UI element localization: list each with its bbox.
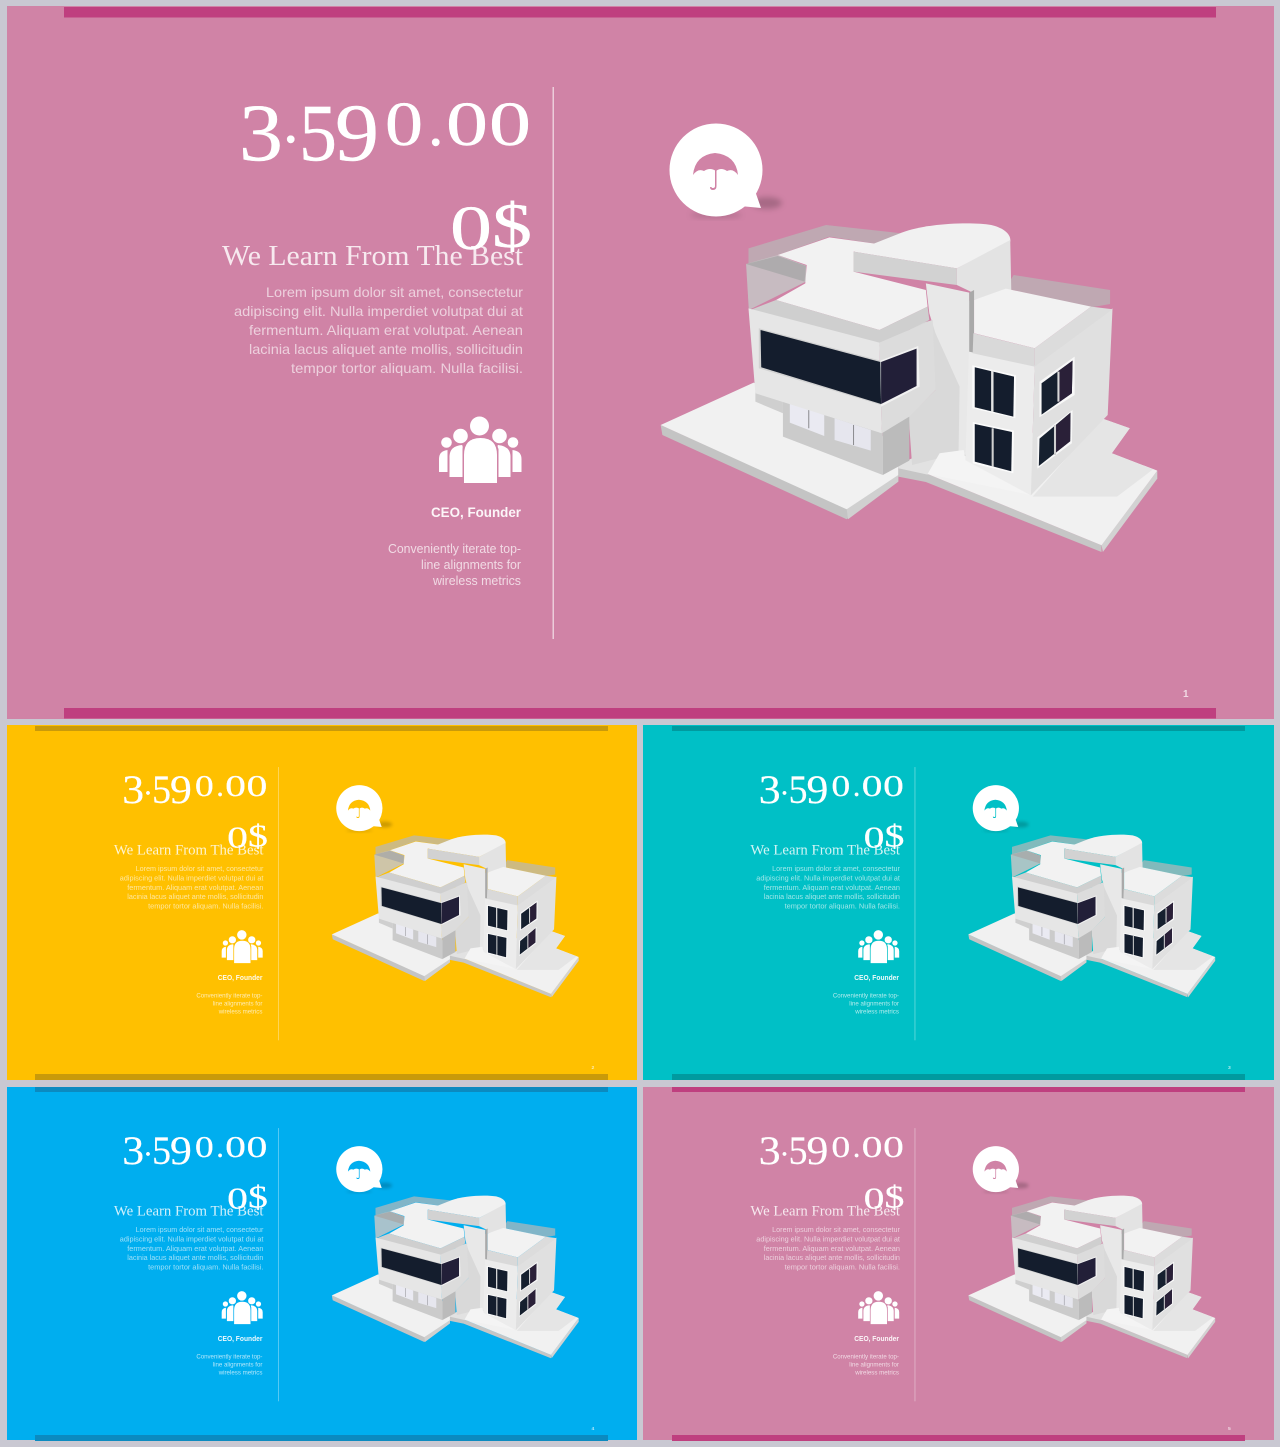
price heading: 0 [862,1130,883,1164]
body text: Lorem ipsum dolor sit amet, consectetur [136,866,264,873]
icon: people group [439,416,522,483]
price heading: 0 [247,769,267,803]
role description: line alignments for [849,1001,899,1008]
price heading: 3 [759,1128,781,1173]
icon: people group [858,1291,899,1324]
illustration: white building [968,835,1215,997]
icon: umbrella speech bubble [670,124,782,218]
price heading: 5 [152,1128,171,1173]
body text: Lorem ipsum dolor sit amet, consectetur [772,866,901,873]
panel: yellow slide [7,725,637,1080]
role description: Conveniently iterate top- [196,993,262,1000]
role label: CEO, Founder [431,504,522,520]
role description: wireless metrics [854,1370,899,1377]
price heading: 5 [152,767,171,812]
price heading: 9 [806,767,828,812]
price heading: 5 [299,87,337,178]
price heading: 5 [789,767,807,812]
price heading: 0 [225,1130,246,1164]
vertical divider line [277,767,280,1040]
body text: fermentum. Aliquam erat volutpat. Aenean [249,322,523,338]
vertical divider line [914,1128,916,1401]
icon: umbrella speech bubble [336,1146,392,1193]
vertical divider line [914,767,916,1040]
role description: Conveniently iterate top- [833,993,899,1000]
price heading: . [216,769,224,803]
body text: tempor tortor aliquam. Nulla facilisi. [785,1265,900,1272]
body text: tempor tortor aliquam. Nulla facilisi. [148,904,264,911]
price heading: 0 [862,769,883,803]
price heading: 0 [247,1130,267,1164]
body text: adipiscing elit. Nulla imperdiet volutpat dui at [756,875,900,882]
slide content [750,767,1231,1071]
price heading: $ [248,1179,268,1214]
icon: people group [222,930,263,963]
price heading: 9 [335,87,379,178]
subtitle: We Learn From The Best [114,843,263,859]
price heading: . [853,769,860,803]
price heading: $ [885,1179,904,1214]
body text: fermentum. Aliquam erat volutpat. Aenean [764,1246,900,1253]
body text: lacinia lacus aliquet ante mollis, sollicitudin [127,1255,264,1262]
price heading: 5 [789,1128,807,1173]
body text: lacinia lacus aliquet ante mollis, sollicitudin [764,1255,900,1262]
role description: line alignments for [213,1362,262,1369]
icon: umbrella speech bubble [973,1146,1029,1193]
icon: umbrella speech bubble [973,785,1029,832]
role label: CEO, Founder [218,1336,263,1343]
panel: small pink slide [643,1087,1274,1441]
body text: fermentum. Aliquam erat volutpat. Aenean [764,885,900,892]
body text: Lorem ipsum dolor sit amet, consectetur [772,1227,901,1234]
subtitle: We Learn From The Best [114,1204,263,1220]
icon: people group [858,930,899,963]
illustration: white building [661,223,1157,552]
body text: fermentum. Aliquam erat volutpat. Aenean [127,1246,264,1253]
price heading: 0 [831,769,850,803]
role description: line alignments for [213,1001,262,1008]
role description: wireless metrics [854,1009,899,1016]
price heading: . [853,1130,860,1164]
price heading: 0 [195,769,214,803]
body text: fermentum. Aliquam erat volutpat. Aenean [127,885,264,892]
illustration: white building [332,835,579,997]
price heading: 0 [489,91,531,159]
body text: tempor tortor aliquam. Nulla facilisi. [148,1265,264,1272]
panel: teal slide [643,725,1274,1080]
role description: line alignments for [849,1362,899,1369]
page number: 2 [591,1065,594,1071]
price heading: 9 [170,767,192,812]
body text: Lorem ipsum dolor sit amet, consectetur [136,1227,264,1234]
price heading: 0 [225,769,246,803]
price heading: 0 [195,1130,214,1164]
role description: Conveniently iterate top- [196,1354,262,1361]
role label: CEO, Founder [218,975,263,982]
role description: Conveniently iterate top- [388,542,521,556]
body text: Lorem ipsum dolor sit amet, consectetur [266,284,523,300]
subtitle: We Learn From The Best [222,240,523,272]
price heading: 3 [239,87,283,178]
page number: 3 [1228,1065,1231,1071]
illustration: white building [968,1196,1215,1358]
body text: tempor tortor aliquam. Nulla facilisi. [291,360,523,376]
price heading: . [781,1128,788,1162]
body text: adipiscing elit. Nulla imperdiet volutpat dui at [234,303,523,319]
icon: umbrella speech bubble [336,785,392,832]
panel: blue slide [7,1087,637,1441]
price heading: . [428,91,444,159]
body text: lacinia lacus aliquet ante mollis, sollicitudin [127,894,264,901]
price heading: 3 [122,767,144,812]
role description: wireless metrics [432,574,521,588]
price heading: $ [492,191,532,261]
body text: adipiscing elit. Nulla imperdiet volutpat dui at [120,1236,263,1243]
price heading: 3 [122,1128,144,1173]
price heading: 0 [227,1181,248,1215]
slide content [114,767,594,1071]
price heading: 0 [864,820,885,854]
price heading: 9 [806,1128,828,1173]
role description: Conveniently iterate top- [833,1354,899,1361]
vertical divider line [552,87,554,639]
price heading: 3 [759,767,781,812]
slide content [750,1128,1231,1432]
page number: 5 [1228,1426,1231,1432]
panel: large pink slide [7,6,1274,719]
page number: 4 [591,1426,594,1432]
subtitle: We Learn From The Best [750,843,900,859]
role description: line alignments for [421,558,521,572]
price heading: 0 [864,1181,885,1215]
illustration: white building [332,1196,579,1358]
body text: lacinia lacus aliquet ante mollis, sollicitudin [249,341,523,357]
price heading: 9 [170,1128,192,1173]
page number: 1 [1183,689,1189,700]
price heading: $ [248,818,268,853]
subtitle: We Learn From The Best [750,1204,900,1220]
body text: lacinia lacus aliquet ante mollis, sollicitudin [764,894,900,901]
price heading: 0 [385,91,423,159]
body text: adipiscing elit. Nulla imperdiet volutpat dui at [120,875,263,882]
price heading: . [144,767,152,801]
body text: tempor tortor aliquam. Nulla facilisi. [785,904,900,911]
role description: wireless metrics [218,1009,262,1016]
price heading: . [144,1128,152,1162]
slide content [114,1128,594,1432]
price heading: 0 [446,91,488,159]
body text: adipiscing elit. Nulla imperdiet volutpat dui at [756,1236,900,1243]
price heading: $ [885,818,904,853]
price heading: 0 [883,769,904,803]
price heading: . [216,1130,224,1164]
price heading: 0 [227,820,248,854]
vertical divider line [277,1128,280,1401]
role description: wireless metrics [218,1370,262,1377]
price heading: 0 [450,195,492,263]
role label: CEO, Founder [854,975,899,982]
price heading: 0 [831,1130,850,1164]
price heading: 0 [883,1130,904,1164]
price heading: . [781,767,788,801]
icon: people group [222,1291,263,1324]
role label: CEO, Founder [854,1336,899,1343]
price heading: . [283,88,298,156]
